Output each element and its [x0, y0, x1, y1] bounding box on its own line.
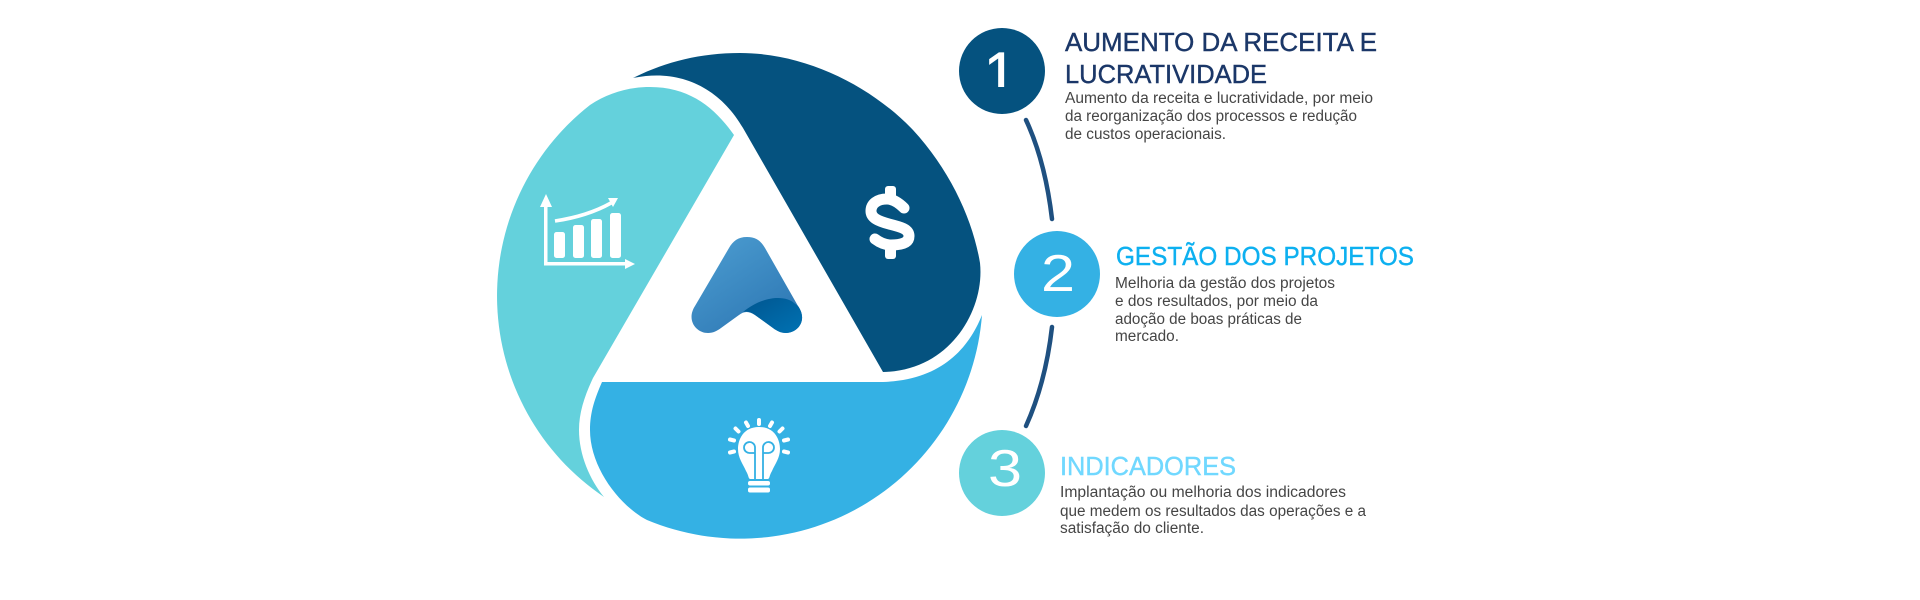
description 3: satisfação do cliente. [1060, 520, 1204, 537]
description 3 [1060, 484, 1366, 537]
connector arc: bottom [1026, 327, 1052, 426]
heading 1: LUCRATIVIDADE [1065, 59, 1267, 89]
heading 3: INDICADORES [1060, 451, 1236, 481]
number badge 3: 3 [988, 440, 1022, 498]
number badge 2: 2 [1041, 245, 1075, 303]
step 3 [959, 430, 1366, 537]
number badge 3 [959, 430, 1045, 516]
connector arc: top [1026, 120, 1052, 219]
description 1: Aumento da receita e lucratividade, por meio [1065, 90, 1373, 107]
number badge 2 [1014, 231, 1100, 317]
icon: light bulb [730, 420, 788, 492]
segment: light blue projects [590, 315, 982, 539]
description 2: adoção de boas práticas de [1115, 311, 1302, 328]
icon: dollar sign [871, 186, 909, 259]
description 1 [1065, 90, 1373, 143]
description 3: Implantação ou melhoria dos indicadores [1060, 484, 1346, 501]
description 2: mercado. [1115, 328, 1179, 345]
step 2 [1014, 231, 1414, 345]
description 2: Melhoria da gestão dos projetos [1115, 275, 1335, 292]
description 3: que medem os resultados das operações e a [1060, 503, 1366, 520]
heading 1: AUMENTO DA RECEITA E [1065, 27, 1377, 57]
segment: teal indicators [497, 87, 734, 497]
description 1: de custos operacionais. [1065, 126, 1226, 143]
logo [692, 237, 802, 333]
segment: dark blue revenue [633, 53, 980, 372]
description 2 [1115, 275, 1335, 345]
infographic [497, 28, 1413, 539]
number badge 1: 1 [984, 41, 1016, 106]
heading 2: GESTÃO DOS PROJETOS [1116, 241, 1414, 271]
description 2: e dos resultados, por meio da [1115, 293, 1318, 310]
number badge 1 [959, 28, 1045, 114]
description 1: da reorganização dos processos e redução [1065, 108, 1357, 125]
step 1 [959, 27, 1377, 143]
heading 1 [1065, 27, 1377, 89]
icon: growth chart [540, 194, 635, 269]
